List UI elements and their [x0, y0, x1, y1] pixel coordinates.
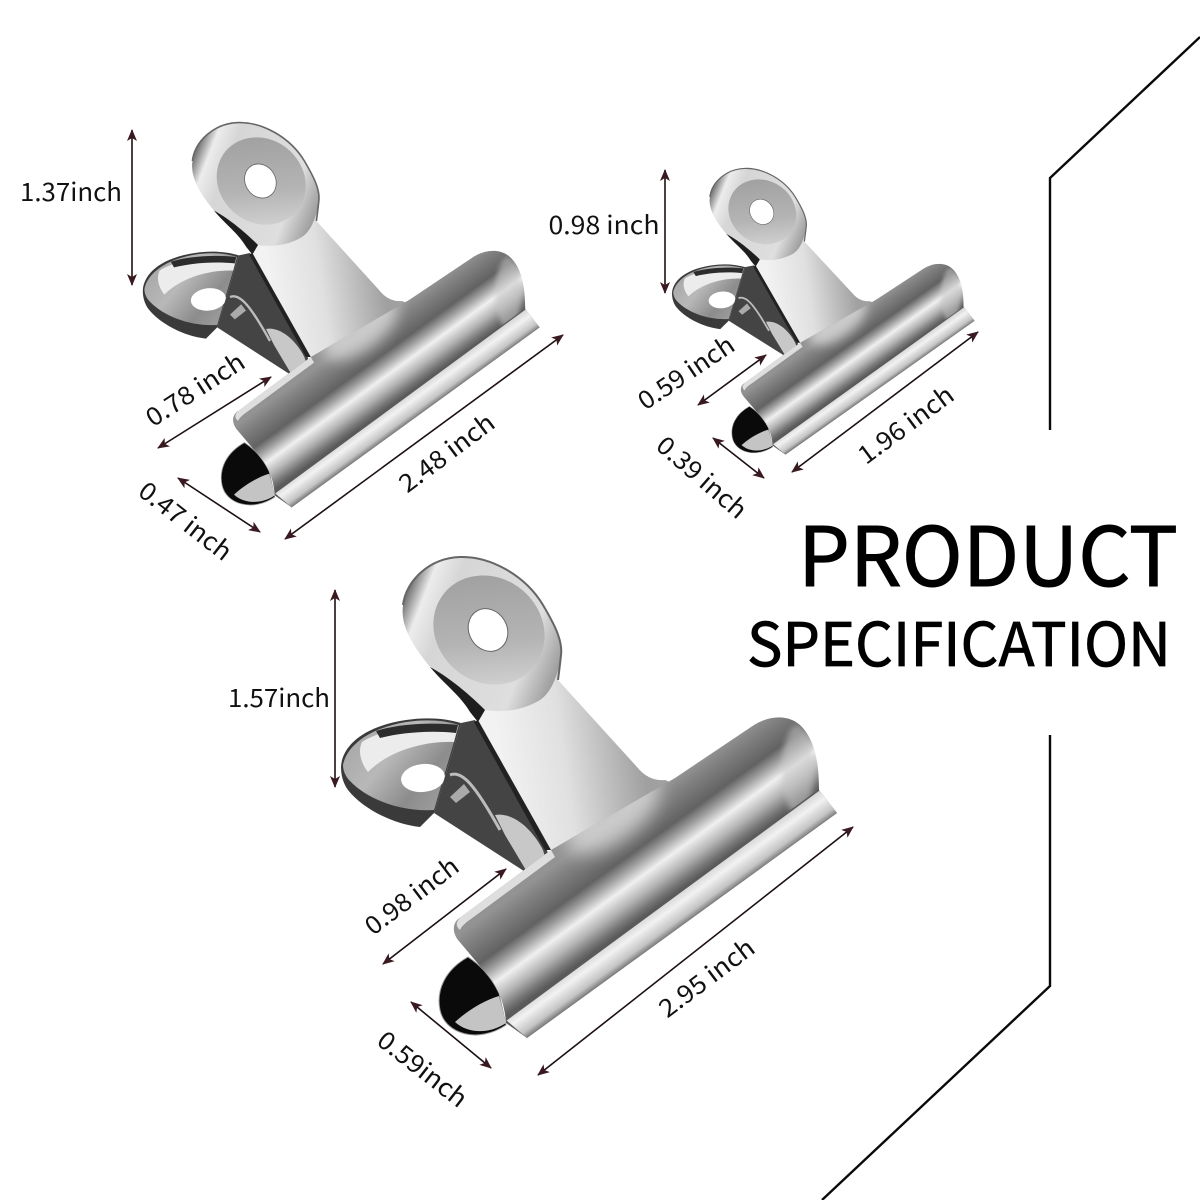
arrow: 0.59 inch [698, 355, 766, 405]
arrow: 0.78 inch [158, 377, 271, 448]
label: 0.98 inch: 0.98 inch [548, 206, 660, 242]
heading: specification: SPECIFICATION [747, 597, 1171, 684]
label: 0.47 inch: 0.47 inch [132, 472, 241, 568]
label: 0.59inch: 0.59inch [370, 1021, 476, 1115]
label: 0.78 inch: 0.78 inch [138, 343, 251, 434]
heading: product: PRODUCT [798, 491, 1178, 610]
frame line: bottom right [822, 735, 1050, 1200]
label: 2.48 inch: 2.48 inch [390, 404, 502, 500]
label: 0.98 inch: 0.98 inch [356, 848, 466, 942]
label: 1.37inch: 1.37inch [20, 173, 122, 209]
frame line: top right [1050, 37, 1200, 430]
arrow: height [664, 170, 666, 293]
arrow: 0.98 inch [383, 869, 506, 964]
medium binder clip with dimensions [20, 119, 563, 568]
arrow: 2.48 inch [285, 335, 563, 539]
clip image: large [341, 553, 837, 1038]
label: 0.59 inch: 0.59 inch [630, 326, 741, 417]
title [747, 491, 1178, 684]
label: 0.39 inch: 0.39 inch [649, 427, 756, 526]
arrow: 2.95 inch [538, 827, 853, 1075]
label: 2.95 inch: 2.95 inch [650, 929, 762, 1025]
label: 1.96 inch: 1.96 inch [849, 376, 961, 472]
arrow: height [334, 590, 336, 787]
small binder clip with dimensions [548, 166, 978, 526]
clip image: small [672, 166, 975, 455]
arrow: 1.96 inch [792, 332, 978, 472]
clip image: medium [143, 119, 540, 507]
arrow: height [131, 130, 133, 285]
label: 1.57inch: 1.57inch [228, 679, 330, 715]
arrow: 0.39 inch [713, 438, 764, 478]
arrow: 0.47 inch [178, 478, 260, 532]
large binder clip with dimensions [228, 553, 853, 1115]
arrow: 0.59 inch [411, 1002, 491, 1068]
